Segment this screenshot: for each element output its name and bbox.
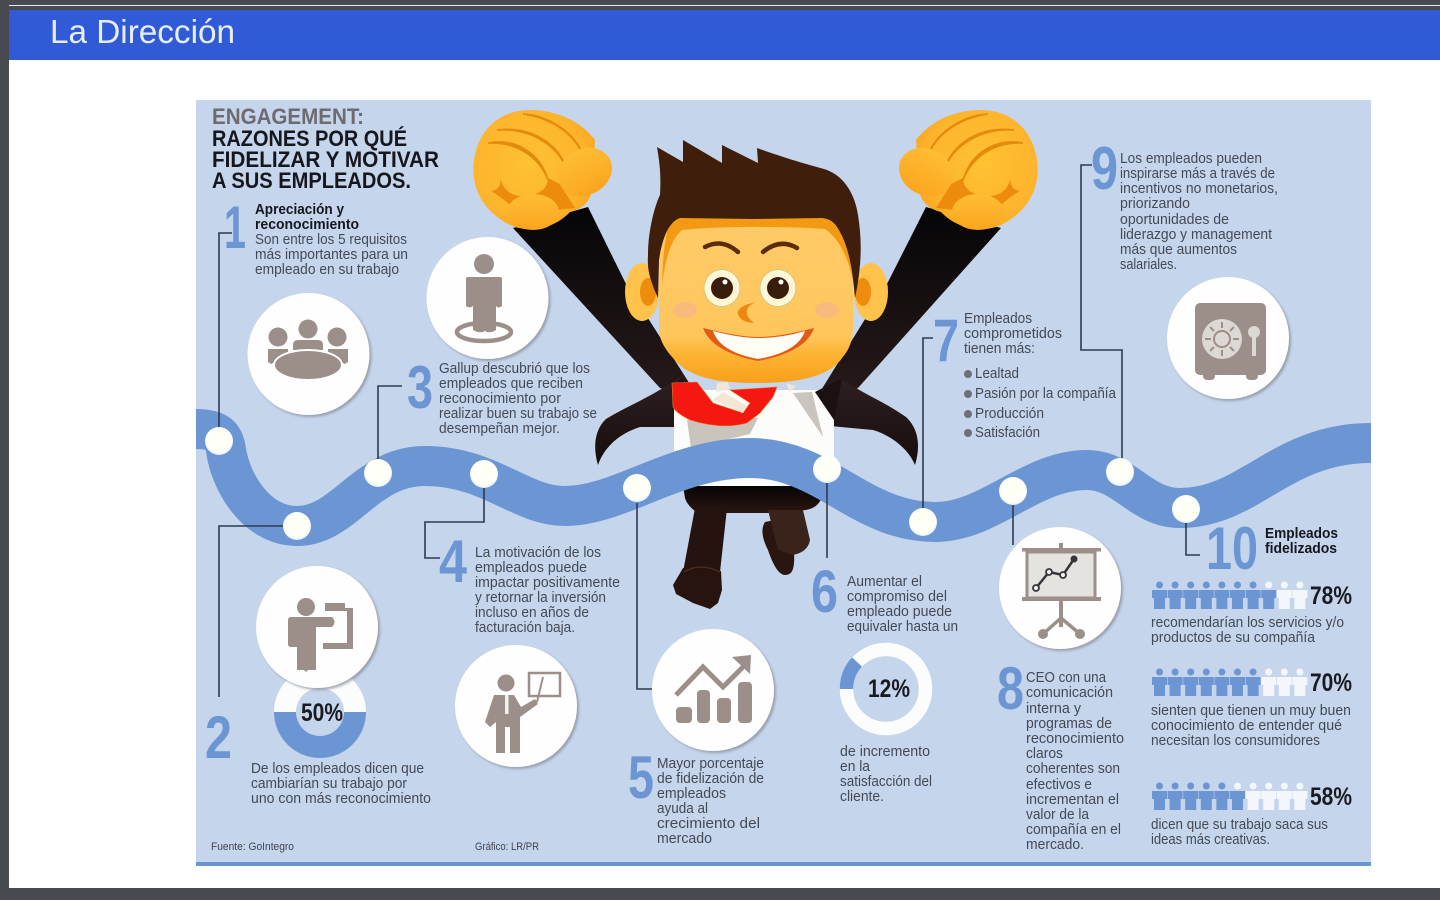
item 9: inspirarse más a través de xyxy=(1120,166,1275,182)
item 8: programas de xyxy=(1026,716,1112,732)
character: arms, jacket and torso behind ribbon xyxy=(513,207,1001,486)
item 3: 3 xyxy=(407,354,433,421)
right back foot xyxy=(762,520,794,575)
item 7: Lealtad xyxy=(975,366,1019,382)
item 9: oportunidades de xyxy=(1120,212,1229,228)
item 8: interna y xyxy=(1026,701,1082,717)
item 1: Son entre los 5 requisitos xyxy=(255,232,407,248)
face xyxy=(659,216,853,383)
stat 58%: dicen que su trabajo saca sus xyxy=(1151,817,1328,833)
item 3: Gallup descubrió que los xyxy=(439,361,590,377)
infographic panel background xyxy=(196,100,1371,866)
item 5: de fidelización de xyxy=(657,771,764,787)
stat 70%: necesitan los consumidores xyxy=(1151,733,1320,749)
stat 70%: conocimiento de entender qué xyxy=(1151,718,1342,734)
item 3: realizar buen su trabajo se xyxy=(439,406,597,422)
item 10 heading xyxy=(1206,515,1338,582)
heading: ENGAGEMENT: xyxy=(212,104,364,129)
item 2: uno con más reconocimiento xyxy=(251,791,431,807)
item 4: facturación baja. xyxy=(475,620,575,636)
item 9: 9 xyxy=(1091,135,1118,202)
right fist xyxy=(890,110,1038,230)
item 9 xyxy=(1091,135,1278,273)
stat 78% xyxy=(1151,582,1352,646)
item 8: compañía en el xyxy=(1026,822,1121,838)
item 8: claros xyxy=(1026,746,1063,762)
source credit: Fuente: GoIntegro xyxy=(211,841,294,853)
icon: meeting group xyxy=(248,293,370,415)
left leg xyxy=(683,508,727,572)
pictogram 58% xyxy=(1152,791,1245,810)
item 4: impactar positivamente xyxy=(475,575,620,591)
item 7: 7 xyxy=(933,307,959,374)
item 7: tienen más: xyxy=(964,341,1035,357)
stat 70%: sienten que tienen un muy buen xyxy=(1151,703,1351,719)
left fist xyxy=(473,110,621,230)
item 6: 6 xyxy=(811,558,838,625)
item 6 result text: satisfacción del xyxy=(840,774,932,790)
header bar xyxy=(9,10,1440,60)
ribbon timeline xyxy=(196,429,1371,526)
pictogram 70% xyxy=(1152,677,1261,696)
item 7: Producción xyxy=(975,406,1044,422)
heading xyxy=(212,104,439,193)
stat 70%: 70% xyxy=(1310,669,1352,697)
item 8 xyxy=(997,655,1124,853)
stat 58%: ideas más creativas. xyxy=(1151,832,1270,848)
hair xyxy=(648,140,861,298)
item 6 result text: cliente. xyxy=(840,789,884,805)
nose xyxy=(738,302,757,323)
item 2: De los empleados dicen que xyxy=(251,761,424,777)
item 9: priorizando xyxy=(1120,196,1190,212)
item 8: reconocimiento xyxy=(1026,731,1124,747)
shoe cuff xyxy=(684,567,720,572)
stat 58%: 58% xyxy=(1310,783,1352,811)
item 10 heading: fidelizados xyxy=(1265,541,1337,557)
item 8: valor de la xyxy=(1026,807,1090,823)
jacket lapels xyxy=(672,378,842,420)
pictogram 70% empty figures xyxy=(1261,677,1307,696)
character: legs xyxy=(673,486,824,609)
item 10 heading: 10 xyxy=(1206,515,1258,582)
hair fringe shadow xyxy=(662,216,854,285)
heading: RAZONES POR QUÉ xyxy=(212,126,407,151)
red scarf xyxy=(672,382,777,426)
item 3 xyxy=(407,354,597,437)
icon: person with board xyxy=(256,566,378,688)
item 8: coherentes son xyxy=(1026,761,1120,777)
shirt collar and tie xyxy=(713,382,796,413)
item 2 xyxy=(205,704,431,807)
item 4: La motivación de los xyxy=(475,545,601,561)
icon: presenter at board xyxy=(455,645,577,767)
shirt shading xyxy=(687,392,823,448)
item 6 result text: de incremento xyxy=(840,744,930,760)
graphic credit: Gráfico: LR/PR xyxy=(475,841,539,853)
item 6 xyxy=(811,558,958,635)
item 9: liderazgo y management xyxy=(1120,227,1272,243)
stat 78%: productos de su compañía xyxy=(1151,630,1316,646)
item 4: y retornar la inversión xyxy=(475,590,606,606)
ears xyxy=(625,263,888,321)
icon: growth chart xyxy=(652,629,774,751)
item 2: 2 xyxy=(205,704,232,771)
item 2: cambiarían su trabajo por xyxy=(251,776,407,792)
item 4 xyxy=(439,528,620,636)
item 4: incluso en años de xyxy=(475,605,589,621)
item 6: equivaler hasta un xyxy=(847,619,958,635)
item 4: 4 xyxy=(439,528,468,595)
item 5: 5 xyxy=(628,744,654,811)
item 9: incentivos no monetarios, xyxy=(1120,181,1278,197)
item 6: Aumentar el xyxy=(847,574,922,590)
gauge 12% xyxy=(846,650,926,728)
jacket tails xyxy=(595,377,918,465)
item 9: Los empleados pueden xyxy=(1120,151,1262,167)
heading: FIDELIZAR Y MOTIVAR xyxy=(212,147,439,172)
stat 78%: recomendarían los servicios y/o xyxy=(1151,615,1344,631)
gauge 12%: 12% xyxy=(868,675,910,703)
right arm xyxy=(815,207,1001,400)
item 2 gauge 50% xyxy=(274,666,366,758)
item 5: mercado xyxy=(657,831,712,847)
pictogram 78% xyxy=(1152,590,1276,609)
item 8: comunicación xyxy=(1026,685,1113,701)
item 3: reconocimiento por xyxy=(439,391,561,407)
item 9: más que aumentos xyxy=(1120,242,1237,258)
leader lines xyxy=(219,165,1200,697)
timeline nodes xyxy=(205,427,1200,540)
panel bottom stripe xyxy=(196,862,1371,866)
eyes xyxy=(704,270,796,306)
item 8: efectivos e xyxy=(1026,777,1092,793)
character: head and fists xyxy=(473,110,1038,383)
smile xyxy=(703,328,814,361)
item 4: empleados puede xyxy=(475,560,587,576)
page title: La Dirección xyxy=(50,13,235,50)
pants waist xyxy=(683,486,824,513)
item 3: empleados que reciben xyxy=(439,376,583,392)
item 8: 8 xyxy=(997,655,1024,722)
item 5: empleados xyxy=(657,786,726,802)
item 1: 1 xyxy=(224,194,246,261)
item 6 result text: en la xyxy=(840,759,871,775)
item 8: incrementan el xyxy=(1026,792,1119,808)
stat 78%: 78% xyxy=(1310,582,1352,610)
stat 58% xyxy=(1151,782,1352,848)
eyebrows xyxy=(705,243,797,252)
item 8: CEO con una xyxy=(1026,670,1107,686)
item 6 result text xyxy=(840,744,932,805)
cheeks xyxy=(673,302,697,318)
item 1 xyxy=(224,194,408,278)
right thigh xyxy=(768,510,810,555)
item 3: desempeñan mejor. xyxy=(439,421,560,437)
item 5: ayuda al xyxy=(657,801,708,817)
left shoe xyxy=(673,568,722,609)
item 5: Mayor porcentaje xyxy=(657,756,764,772)
item 6: empleado puede xyxy=(847,604,952,620)
item 7: Pasión por la compañía xyxy=(975,386,1117,402)
pictogram 78% empty figures xyxy=(1277,590,1307,609)
top highlight line xyxy=(9,5,1440,6)
item 7 xyxy=(933,307,1117,441)
item 1: reconocimiento xyxy=(255,217,359,233)
item 1: Apreciación y xyxy=(255,202,344,218)
item 5: crecimiento del xyxy=(657,816,760,832)
pictogram 58% empty figures xyxy=(1246,791,1307,810)
item 9: salariales. xyxy=(1120,257,1177,273)
item 7: Satisfación xyxy=(975,425,1040,441)
stat 70% xyxy=(1151,668,1352,749)
item 1: más importantes para un xyxy=(255,247,408,263)
heading: A SUS EMPLEADOS. xyxy=(212,168,411,193)
shirt xyxy=(674,390,834,486)
left arm xyxy=(513,207,700,400)
icon: presentation board xyxy=(999,527,1121,649)
item 1: empleado en su trabajo xyxy=(255,262,399,278)
icon: standing person on target xyxy=(426,237,548,359)
item 5 xyxy=(628,744,764,847)
item 10 heading: Empleados xyxy=(1265,526,1338,542)
item 7: Empleados xyxy=(964,311,1032,327)
item 2 gauge 50%: 50% xyxy=(301,699,343,727)
item 7: comprometidos xyxy=(964,326,1062,342)
item 8: mercado. xyxy=(1026,837,1084,853)
item 6: compromiso del xyxy=(847,589,947,605)
icon: safe xyxy=(1167,277,1289,399)
